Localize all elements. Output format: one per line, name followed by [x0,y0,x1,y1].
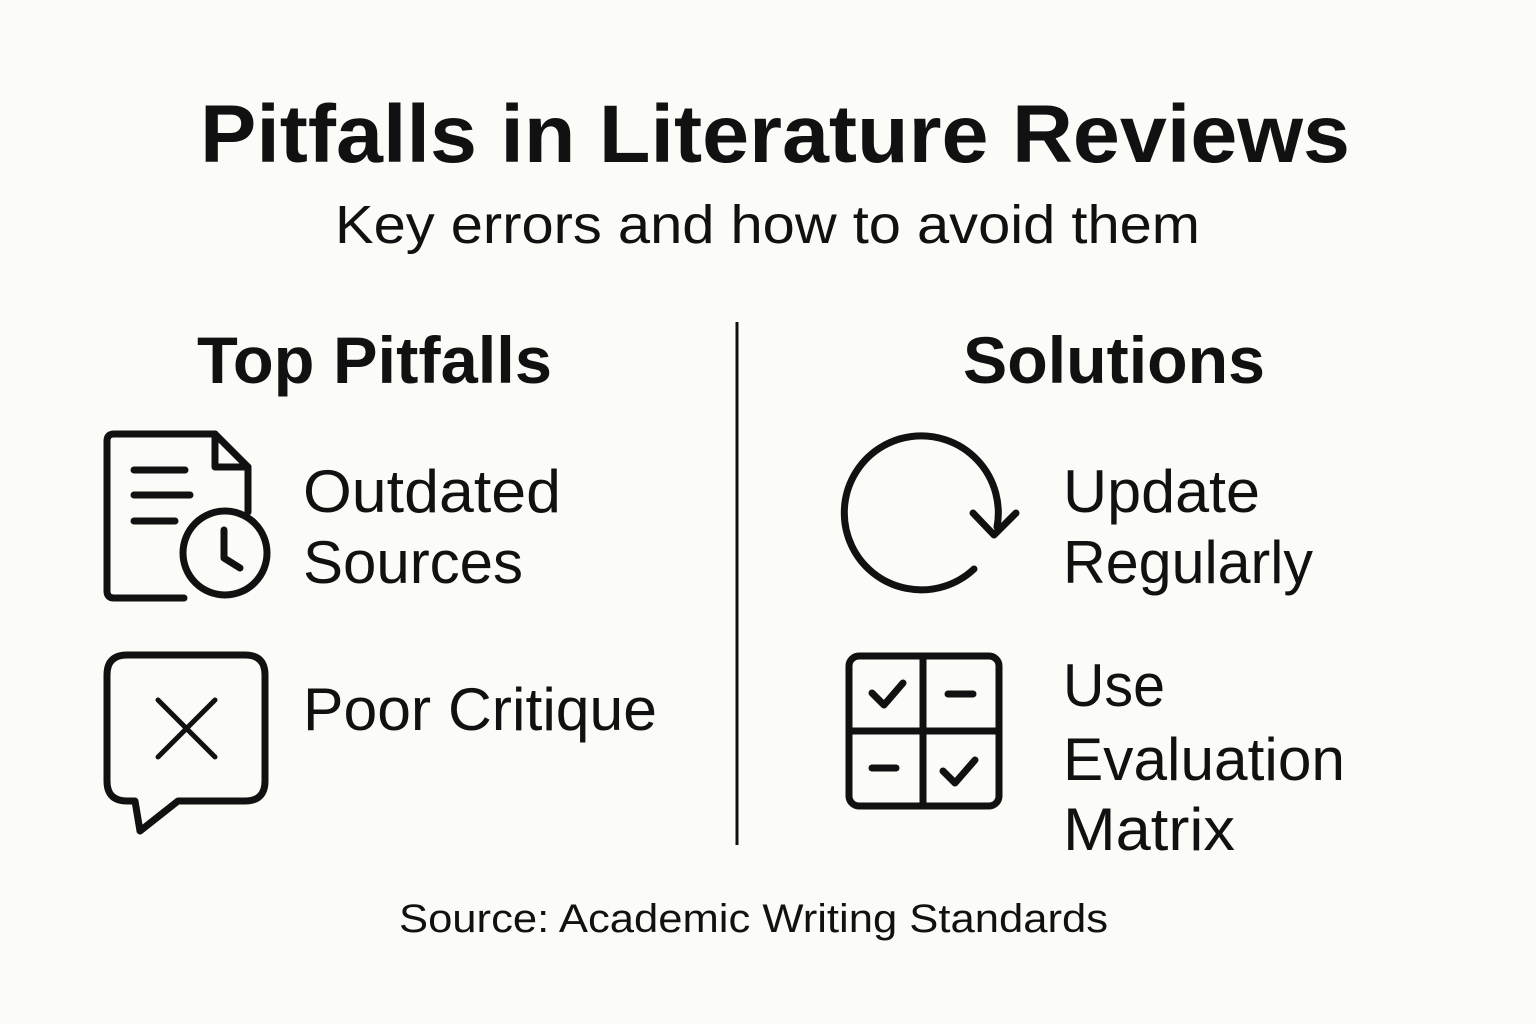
text: outdated sources: Sources [303,529,523,596]
title: Pitfalls in Literature Reviews [200,89,1350,180]
subtitle: Key errors and how to avoid them [335,195,1200,255]
icon: refresh arrow [844,436,1016,590]
icon: speech bubble with X [107,655,265,831]
divider [736,322,738,845]
icon: document with clock [107,434,267,598]
text: use evaluation matrix [1063,652,1345,863]
text: outdated sources [303,458,561,596]
text: use evaluation matrix: Matrix [1063,796,1235,863]
heading: top pitfalls: Top Pitfalls [197,323,552,397]
icon: evaluation matrix [849,656,999,806]
source: Source: Academic Writing Standards [399,897,1108,941]
text: poor critique: Poor Critique [303,676,657,743]
text: use evaluation matrix: Use [1063,652,1165,719]
heading: solutions: Solutions [963,323,1265,397]
text: update regularly [1063,458,1313,596]
text: update regularly: Regularly [1063,529,1313,596]
text: use evaluation matrix: Evaluation [1063,726,1345,793]
text: update regularly: Update [1063,458,1260,525]
text: outdated sources: Outdated [303,458,561,525]
